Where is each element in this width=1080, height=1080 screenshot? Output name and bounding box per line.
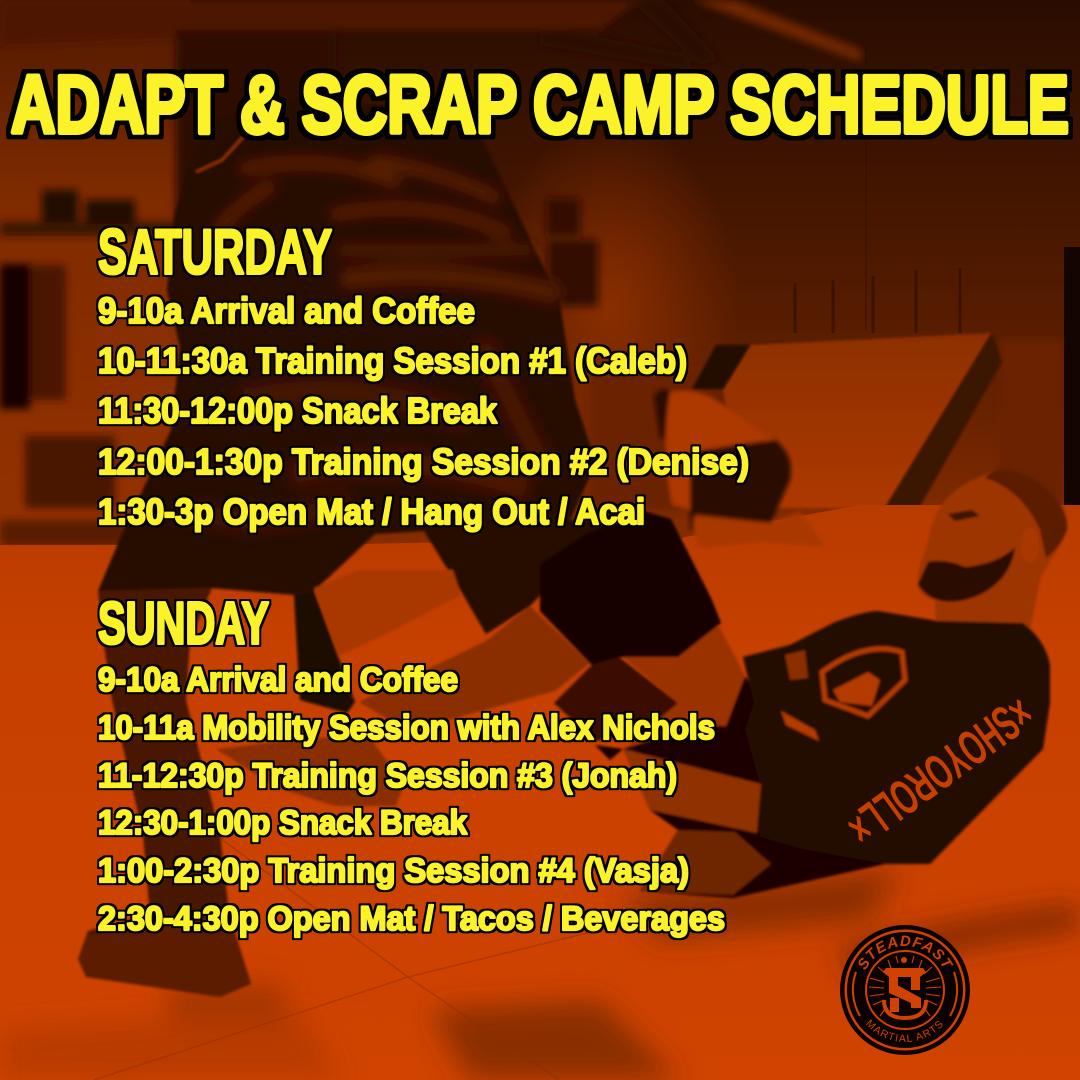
knee sleeve [540, 510, 721, 665]
shorts and leg shadow [595, 676, 885, 898]
Sunday item 6: 2:30-4:30p Open Mat / Tacos / Beverages [98, 900, 725, 938]
panel: Sunday schedule [98, 590, 725, 938]
Sunday item 4: 12:30-1:00p Snack Break [98, 804, 467, 842]
Saturday item 4: 12:00-1:30p Training Session #2 (Denise) [98, 441, 749, 482]
logo: Steadfast Martial Arts badge: STEADFAST [858, 936, 954, 970]
mat floor [0, 505, 1080, 1080]
Sunday item 2: 10-11a Mobility Session with Alex Nichols [98, 709, 715, 747]
floor shading [0, 870, 1080, 1080]
Saturday item 3: 11:30-12:00p Snack Break [98, 390, 498, 431]
sleeve lettering: ×SHOYOROLL× [837, 685, 1043, 857]
Saturday item 2: 10-11:30a Training Session #1 (Caleb) [98, 340, 687, 381]
torso and arm [743, 611, 1050, 864]
lying fighter [540, 469, 1067, 898]
logo letter mark [883, 968, 926, 1018]
heading: Sunday: SUNDAY [98, 590, 269, 656]
leaning mat [723, 333, 992, 508]
standing fighter [78, 100, 612, 997]
heading: Saturday: SATURDAY [98, 218, 332, 288]
Sunday item 1: 9-10a Arrival and Coffee [98, 661, 458, 699]
Sunday item 3: 11-12:30p Training Session #3 (Jonah) [98, 757, 677, 795]
logo: Steadfast Martial Arts badge [840, 925, 970, 1055]
Sunday item 5: 1:00-2:30p Training Session #4 (Vasja) [98, 852, 689, 890]
neck and head [917, 469, 1067, 630]
Saturday item 5: 1:30-3p Open Mat / Hang Out / Acai [98, 491, 645, 532]
hand and foot [623, 749, 761, 833]
background person [654, 389, 825, 548]
chest logo [822, 649, 905, 716]
logo: Steadfast Martial Arts badge: MARTIAL ARTS [866, 1020, 942, 1042]
Saturday item 1: 9-10a Arrival and Coffee [98, 290, 475, 331]
panel: Saturday schedule [98, 218, 749, 532]
